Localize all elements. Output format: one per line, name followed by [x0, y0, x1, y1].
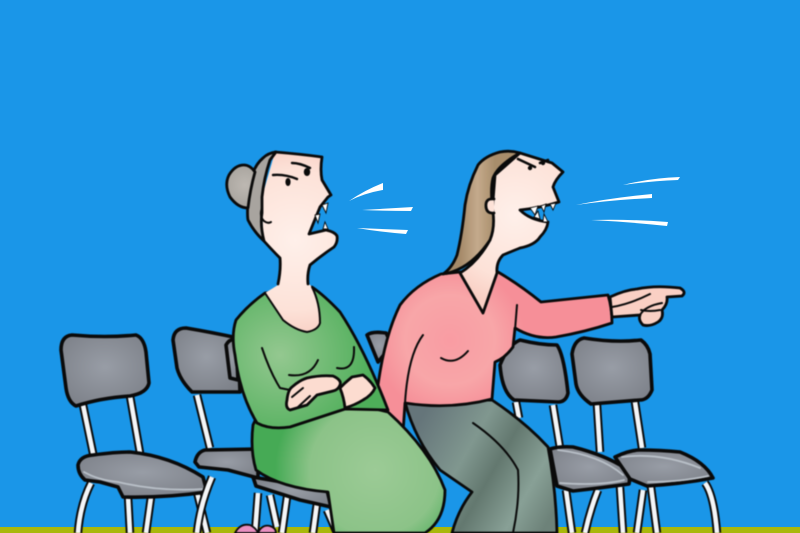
inner arm line [405, 335, 423, 403]
neck and chest skin [265, 258, 320, 332]
face outline [263, 152, 337, 284]
brows [273, 163, 310, 179]
fingers [612, 294, 662, 315]
woman in pink [378, 151, 684, 533]
finger lines [292, 388, 310, 407]
long hair [443, 151, 520, 274]
hair [248, 152, 276, 241]
ear [486, 199, 494, 213]
skirt [252, 400, 445, 533]
chair 4 [500, 340, 630, 533]
chair 2 [173, 328, 258, 533]
woman in green [227, 152, 445, 533]
scene artwork [61, 151, 717, 533]
eyes [285, 168, 310, 186]
sleeve crease [515, 305, 517, 330]
neckline [265, 287, 320, 332]
chest creases [289, 347, 354, 375]
pink blouse [378, 272, 612, 433]
right hand [340, 375, 375, 408]
trouser crease [473, 423, 518, 533]
upper and lower teeth [315, 203, 328, 229]
grey trousers [405, 400, 557, 533]
speech lines: pink woman [576, 177, 680, 226]
pointing hand [610, 287, 684, 326]
chest line [441, 351, 468, 361]
neck and face [460, 153, 563, 313]
chair back between the women [367, 332, 392, 362]
eyes [528, 161, 545, 170]
ground strip [0, 527, 800, 533]
face fill [262, 152, 337, 290]
chair 5 [572, 338, 717, 533]
blouse torso and sleeves [233, 287, 388, 428]
chair 1 [61, 335, 207, 533]
speech lines: green woman [349, 183, 413, 234]
arm crease [262, 348, 290, 390]
chair 3 under green woman [226, 340, 337, 533]
left arm and hand [286, 376, 340, 410]
hair bun [227, 165, 255, 208]
angry brows [518, 159, 548, 167]
shoes [235, 525, 276, 533]
ear [261, 208, 271, 223]
teeth [530, 203, 556, 222]
